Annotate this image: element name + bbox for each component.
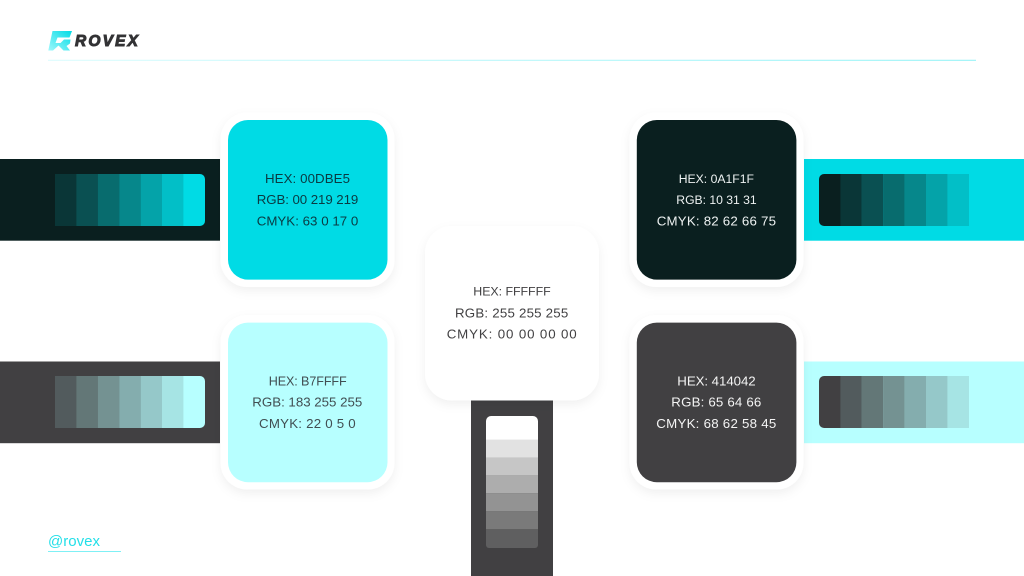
card: dark teal colour values bbox=[630, 112, 804, 287]
header divider line bbox=[48, 59, 976, 62]
text: light cyan values: RGB: 183 255 255 bbox=[252, 395, 362, 410]
panel: light cyan shade strip bbox=[0, 362, 220, 443]
text: charcoal values: RGB: 65 64 66 bbox=[671, 395, 761, 410]
text: cyan values bbox=[257, 171, 358, 228]
text: cyan values: RGB: 00 219 219 bbox=[257, 192, 358, 207]
text: charcoal values bbox=[656, 373, 776, 431]
text: light cyan values bbox=[252, 374, 362, 431]
text: dark teal values bbox=[657, 172, 776, 228]
panel: charcoal shade strip bbox=[804, 362, 1024, 443]
text: cyan values: CMYK: 63 0 17 0 bbox=[257, 213, 358, 228]
text: light cyan values: CMYK: 22 0 5 0 bbox=[259, 416, 356, 431]
text: white values: HEX: FFFFFF bbox=[473, 285, 551, 299]
swatch: cyan tints bbox=[55, 174, 205, 226]
text: dark teal values: RGB: 10 31 31 bbox=[676, 193, 757, 207]
card: light cyan colour values bbox=[220, 315, 394, 490]
icon: Rovex R mark bbox=[48, 31, 72, 50]
swatch: dark teal tints bbox=[819, 174, 969, 226]
text: white values bbox=[447, 285, 577, 342]
text: charcoal values: HEX: 414042 bbox=[677, 373, 756, 388]
text: cyan values: HEX: 00DBE5 bbox=[265, 171, 350, 186]
swatch: charcoal tints bbox=[819, 376, 969, 428]
text: dark teal values: HEX: 0A1F1F bbox=[679, 172, 754, 186]
footer handle bbox=[48, 533, 121, 552]
text: white values: RGB: 255 255 255 bbox=[455, 305, 568, 320]
panel: cyan shade strip bbox=[0, 159, 220, 241]
card: cyan colour values bbox=[220, 112, 394, 287]
text: charcoal values: CMYK: 68 62 58 45 bbox=[656, 416, 776, 431]
text: light cyan values: HEX: B7FFFF bbox=[269, 374, 347, 388]
logo bbox=[48, 31, 140, 50]
panel: white shade strip bbox=[471, 400, 553, 576]
text: dark teal values: CMYK: 82 62 66 75 bbox=[657, 213, 776, 228]
card: white colour values bbox=[425, 226, 599, 400]
swatch: grey tints bbox=[486, 416, 538, 548]
text: white values: CMYK: 00 00 00 00 bbox=[447, 327, 577, 342]
swatch: light cyan tints bbox=[55, 376, 205, 428]
card: charcoal colour values bbox=[630, 315, 804, 490]
panel: dark teal shade strip bbox=[804, 159, 1024, 241]
footer handle: @rovex bbox=[48, 533, 100, 550]
wordmark: ROVEX bbox=[75, 33, 140, 50]
